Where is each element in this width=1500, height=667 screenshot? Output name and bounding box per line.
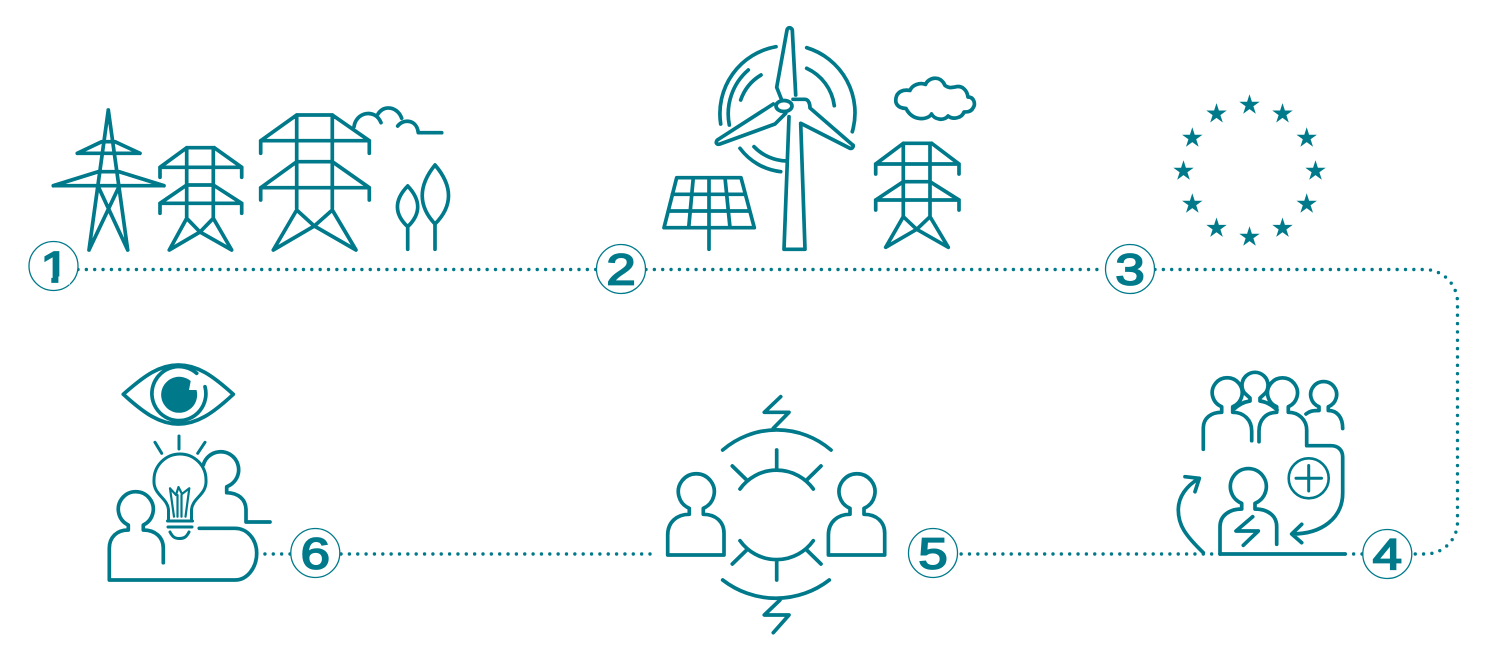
curved arrow [1178, 477, 1203, 553]
turbine tower and blades [716, 28, 853, 249]
bottom bolt [764, 600, 789, 633]
pylon [876, 143, 959, 247]
back right person [1306, 382, 1343, 428]
icon: community group with plus and arrows [1178, 372, 1345, 554]
step badge 2: 2 [606, 246, 636, 294]
step badge 4: 4 [1373, 531, 1402, 579]
slim pylon [53, 110, 164, 250]
plus badge ring [1289, 458, 1329, 498]
icon: two people and facing energy arcs [668, 397, 885, 633]
cloud [896, 78, 974, 119]
eye outline [123, 365, 233, 424]
plus badge [1296, 466, 1322, 491]
icon: wind turbine, solar panel, pylon and cloud [664, 28, 974, 249]
third person with connecting arrow [1259, 378, 1343, 543]
step badge 6: 6 [301, 530, 330, 578]
step badge 5 [908, 528, 958, 578]
bulb rays [155, 436, 205, 453]
cloud outline [354, 108, 442, 133]
rear person [203, 452, 270, 522]
step badge 1: 1 [40, 243, 70, 292]
step badge 2 [596, 244, 646, 294]
step badge 1 [29, 242, 78, 292]
back middle person [1233, 372, 1277, 410]
rotation arcs [720, 47, 855, 172]
bottom arcs and rays [723, 541, 829, 598]
solar panel [664, 178, 754, 249]
front person and table [109, 492, 257, 580]
step badge 6 [291, 528, 340, 578]
step badge 4 [1363, 530, 1412, 579]
ground line [1220, 552, 1345, 556]
icon: circle of twelve stars [1173, 94, 1326, 246]
icon: eye above people with light bulb [109, 365, 270, 580]
top arcs and rays [723, 430, 831, 489]
pupil [161, 377, 197, 413]
step badge 3 [1106, 244, 1154, 294]
front person with bolt [1220, 469, 1277, 554]
icon: transmission towers, cloud and trees [53, 108, 449, 250]
light bulb [154, 454, 206, 538]
trees [397, 165, 448, 249]
filament [170, 487, 189, 517]
left person [668, 474, 724, 555]
top bolt [764, 397, 789, 428]
medium pylon [160, 148, 242, 250]
right person [828, 474, 885, 555]
step badge 5: 5 [918, 530, 948, 578]
dotted connector path [78, 270, 1458, 554]
turbine hub [776, 100, 792, 112]
back left person [1203, 378, 1252, 449]
large pylon [261, 115, 369, 250]
step badge 3: 3 [1115, 246, 1145, 294]
iris ring [152, 367, 206, 421]
